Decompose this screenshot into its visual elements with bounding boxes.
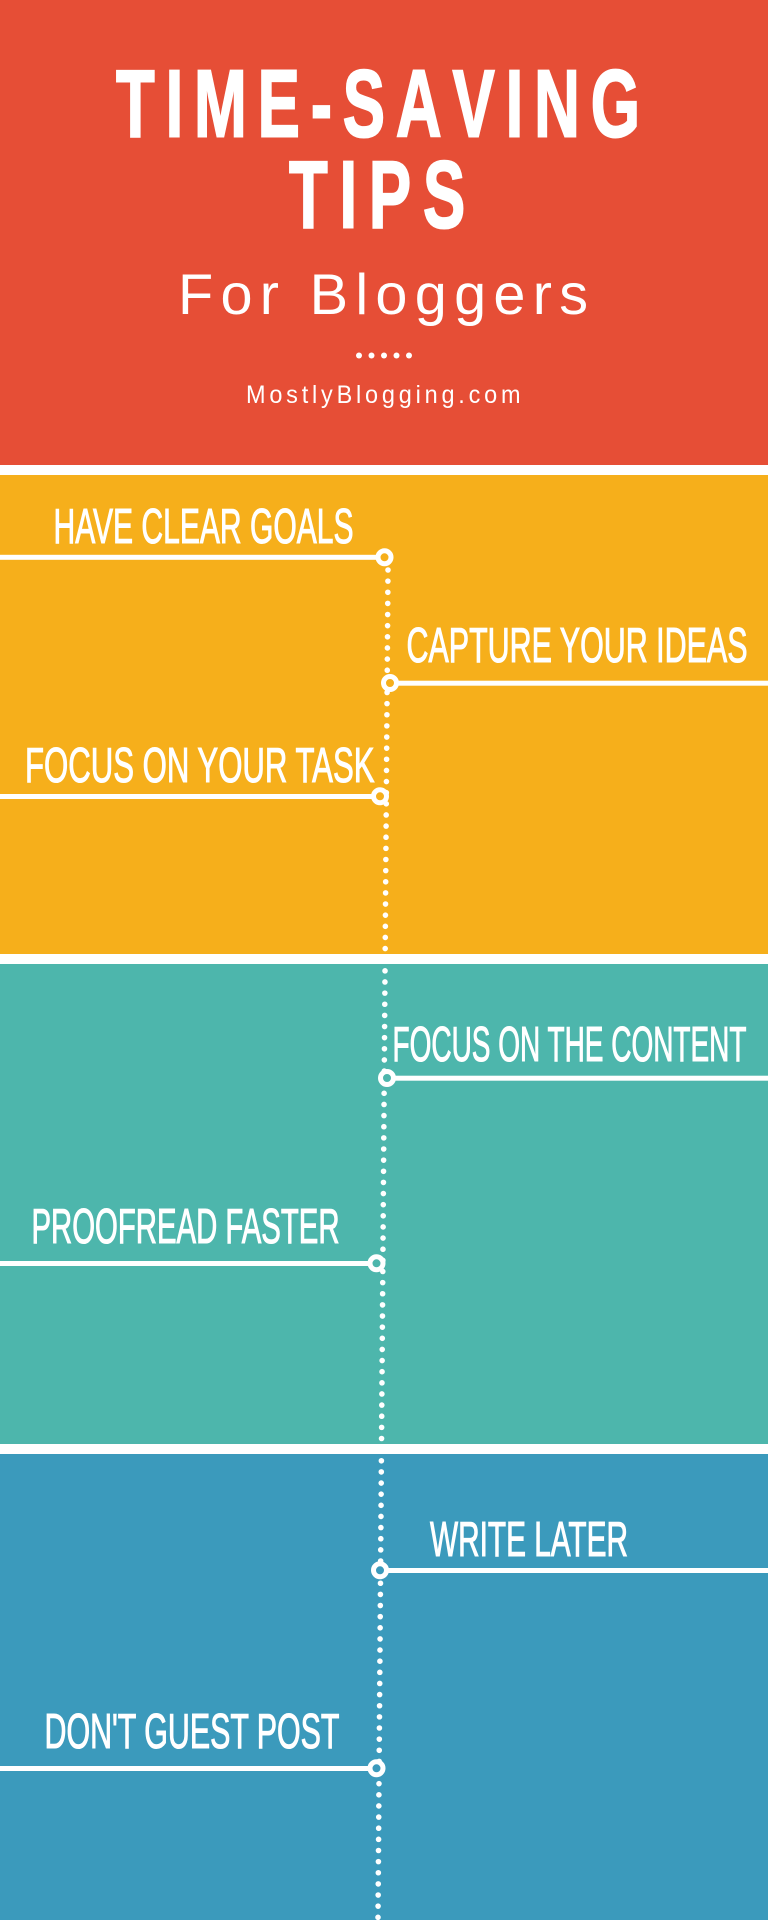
tip: proofread faster: PROOFREAD FASTER xyxy=(32,1199,340,1254)
tip: don't guest post xyxy=(0,1704,383,1775)
panel: yellow section xyxy=(0,475,768,954)
tip: don't guest post: DON'T GUEST POST xyxy=(44,1704,340,1759)
tip: have clear goals xyxy=(0,499,391,564)
title: line two: TIPS xyxy=(289,141,465,249)
title: line one: TIME-SAVING xyxy=(116,50,640,158)
tip: have clear goals: HAVE CLEAR GOALS xyxy=(54,499,354,554)
panel: teal section xyxy=(0,964,768,1444)
tip: proofread faster xyxy=(0,1199,383,1270)
tip: focus on your task xyxy=(0,738,386,803)
tip: focus on your task: FOCUS ON YOUR TASK xyxy=(25,738,374,793)
tip: write later: WRITE LATER xyxy=(430,1512,628,1567)
panel: header xyxy=(0,0,768,465)
website name: MostlyBlogging.com xyxy=(246,381,521,409)
dotted separator xyxy=(356,352,412,358)
subtitle: For Bloggers xyxy=(178,263,588,327)
dotted timeline xyxy=(378,570,388,1917)
panel: blue section xyxy=(0,1454,768,1920)
